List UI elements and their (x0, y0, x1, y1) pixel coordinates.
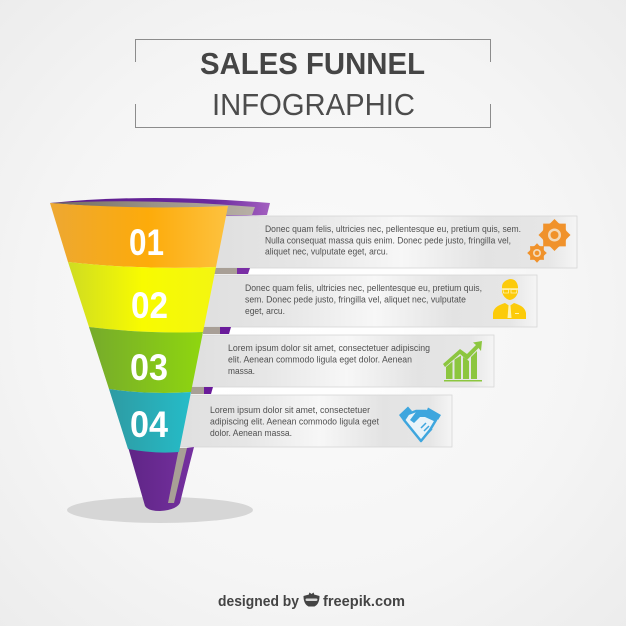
text: banner 1: Nulla consequat massa quis enim. Donec pede justo, fringilla vel, (265, 236, 511, 246)
icon: businessman (493, 279, 526, 319)
footer credit: designed by (218, 594, 299, 610)
icon: gears (527, 219, 570, 263)
icon: freepik logo (304, 592, 320, 606)
panel: banner 2 (200, 275, 537, 327)
funnel: purple base (128, 447, 194, 511)
number 02: 02 (131, 285, 168, 326)
text: banner 2 (245, 283, 482, 316)
text: banner 3: Lorem ipsum dolor sit amet, consectetuer adipiscing (228, 343, 430, 353)
panel: banner 3 (188, 335, 494, 387)
title block (136, 40, 490, 128)
panel: banner 1 (212, 216, 577, 268)
funnel: segment 1 orange (50, 203, 228, 268)
title frame (136, 40, 490, 128)
connector strip 1 (214, 268, 534, 275)
text: banner 1: aliquet nec, vulputate eget, arcu. (265, 246, 388, 256)
text: banner 3: massa. (228, 366, 255, 376)
text: banner 2: eget, arcu. (245, 306, 285, 316)
text: banner 3: elit. Aenean commodo ligula eget dolor. Aenean (228, 354, 412, 364)
heading: infographic: INFOGRAPHIC (212, 87, 415, 122)
text: banner 4 (210, 405, 379, 438)
number 04: 04 (130, 404, 168, 445)
connector strip 3 (191, 387, 441, 395)
connector strip 2 (203, 327, 483, 335)
number 03: 03 (130, 347, 168, 388)
text: banner 4: dolor. Aenean massa. (210, 428, 292, 438)
text: banner 4: Lorem ipsum dolor sit amet, consectetuer (210, 405, 370, 415)
panel: banner 4 (176, 395, 452, 447)
footer credit: freepik.com (323, 594, 405, 610)
text: banner 2: sem. Donec pede justo, fringilla vel, aliquet nec, vulputate (245, 294, 466, 304)
heading: sales funnel: SALES FUNNEL (200, 46, 425, 81)
icon: growth chart (443, 341, 482, 382)
funnel: segment 3 green (89, 327, 203, 393)
text: banner 3 (228, 343, 430, 376)
icon: handshake (399, 406, 441, 441)
text: banner 4: adipiscing elit. Aenean commodo ligula eget (210, 416, 379, 426)
text: banner 2: Donec quam felis, ultricies nec, pellentesque eu, pretium quis, (245, 283, 482, 293)
number 01: 01 (129, 222, 164, 263)
funnel: segment 4 teal (109, 389, 191, 453)
text: banner 1: Donec quam felis, ultricies nec, pellentesque eu, pretium quis, sem. (265, 224, 521, 234)
funnel back: rim (50, 198, 270, 216)
funnel shadow (67, 497, 253, 523)
text: banner 1 (265, 224, 521, 256)
footer credit (218, 592, 405, 610)
funnel: segment 2 yellow (68, 262, 216, 332)
